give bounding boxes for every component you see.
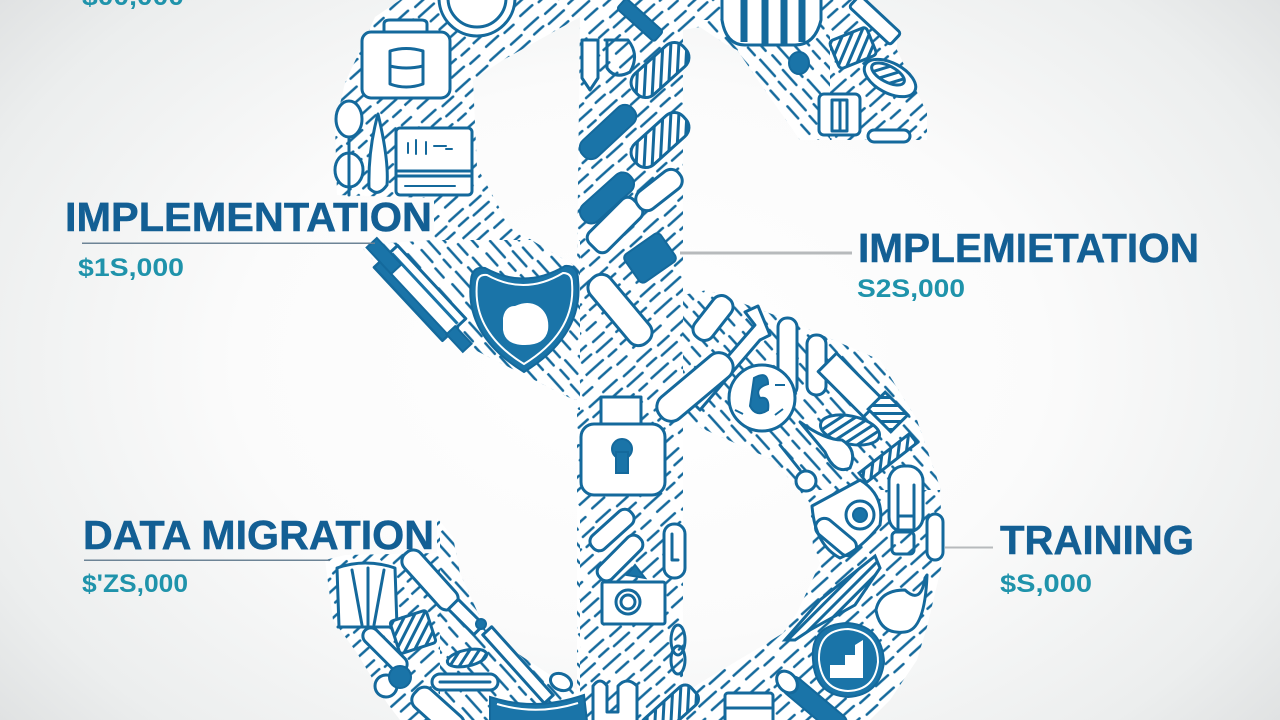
icon: top blue tool	[617, 0, 663, 42]
icon: vertical tube	[778, 318, 797, 396]
icon: ellipse burger	[858, 52, 922, 104]
icon: pipe	[593, 681, 637, 720]
icon: top right handle	[849, 0, 901, 45]
icon: tall capsule	[889, 466, 923, 554]
icon: hammer	[690, 306, 770, 410]
icon: long pill lower left	[398, 546, 486, 635]
icon: wrench	[360, 625, 411, 697]
icon: small capsule	[927, 514, 943, 560]
icon: outlined tool	[632, 165, 686, 215]
icon: thermometer spoon	[780, 422, 853, 491]
icon: oval tool below padlock	[587, 506, 637, 554]
icon: striped tool one	[626, 38, 694, 102]
icon: small knot	[671, 625, 685, 674]
icon: hatched clamp	[622, 231, 678, 285]
icon: knife right	[818, 353, 908, 432]
icon: bottom right pill	[772, 667, 851, 720]
amount: $1S,000	[78, 254, 184, 282]
amount: $S,000	[1000, 570, 1092, 598]
icon: long tool	[483, 627, 553, 703]
icon: outlined pill upper	[584, 194, 646, 256]
leader line	[945, 546, 993, 548]
icon: bottom pill left	[408, 683, 468, 720]
icon: striped tool two	[626, 108, 694, 172]
dollar sign mosaic of icons	[320, 0, 953, 720]
icon: filled dome with chart	[813, 623, 884, 697]
label block: implementation right	[680, 225, 1199, 303]
amount: S2S,000	[857, 275, 965, 303]
icon: pen	[859, 434, 917, 482]
icon: hook	[605, 40, 635, 75]
icon: pen wedge	[594, 532, 646, 584]
icon: spoon	[335, 101, 363, 195]
icon: hook curve	[876, 575, 927, 632]
icon: blue blob	[789, 52, 809, 74]
leader line	[84, 560, 330, 561]
icon: bottom shield	[490, 695, 588, 720]
icon: long capsule	[432, 674, 498, 690]
icon: diagonal striped tool bottom	[638, 682, 702, 720]
icon: fish eye	[812, 480, 881, 559]
icon: oval tool	[689, 292, 737, 344]
icon: small pill	[868, 130, 910, 142]
icon: door box	[819, 94, 860, 135]
icon: blue brush two	[576, 168, 638, 228]
icon: bottom stack box	[725, 693, 773, 720]
heading: IMPLEMIETATION	[858, 225, 1199, 271]
amount: $'ZS,000	[82, 570, 188, 598]
icon: knife	[369, 114, 387, 192]
icon: camera	[602, 565, 665, 624]
icon: leaf blob	[818, 410, 882, 450]
icon: usb stick	[582, 40, 598, 90]
icon: bin box	[337, 563, 397, 627]
icon: capsule tall	[807, 335, 826, 395]
icon: long pill	[652, 347, 738, 427]
label block: data migration	[82, 512, 434, 598]
heading: TRAINING	[1000, 517, 1194, 563]
icon: laptop	[396, 128, 472, 195]
icon: shield with blob	[470, 266, 579, 372]
heading: DATA MIGRATION	[83, 512, 434, 558]
icon: blue brush one	[576, 101, 640, 163]
icon: oval	[548, 670, 574, 694]
icon: leaf lower	[446, 646, 488, 670]
icon: capsule with letter	[664, 524, 685, 578]
icon: padlock	[581, 397, 665, 495]
icon: striped barrel	[722, 0, 821, 45]
label block: implementation left	[65, 194, 432, 282]
icon: hatched stack	[390, 610, 436, 654]
icon: outlined pill centre	[583, 269, 657, 351]
icon: big leaf	[785, 556, 880, 640]
icon: hatched brush	[829, 27, 877, 69]
hatched texture filling the dollar shape	[320, 0, 953, 720]
icon: plate	[439, 0, 515, 36]
label block: training	[945, 517, 1194, 598]
leader line	[680, 252, 852, 254]
icon: briefcase	[362, 20, 450, 98]
heading: IMPLEMENTATION	[65, 194, 432, 240]
leader line	[82, 242, 375, 244]
icon: syringe	[367, 238, 472, 352]
icon: round emblem	[729, 365, 795, 431]
